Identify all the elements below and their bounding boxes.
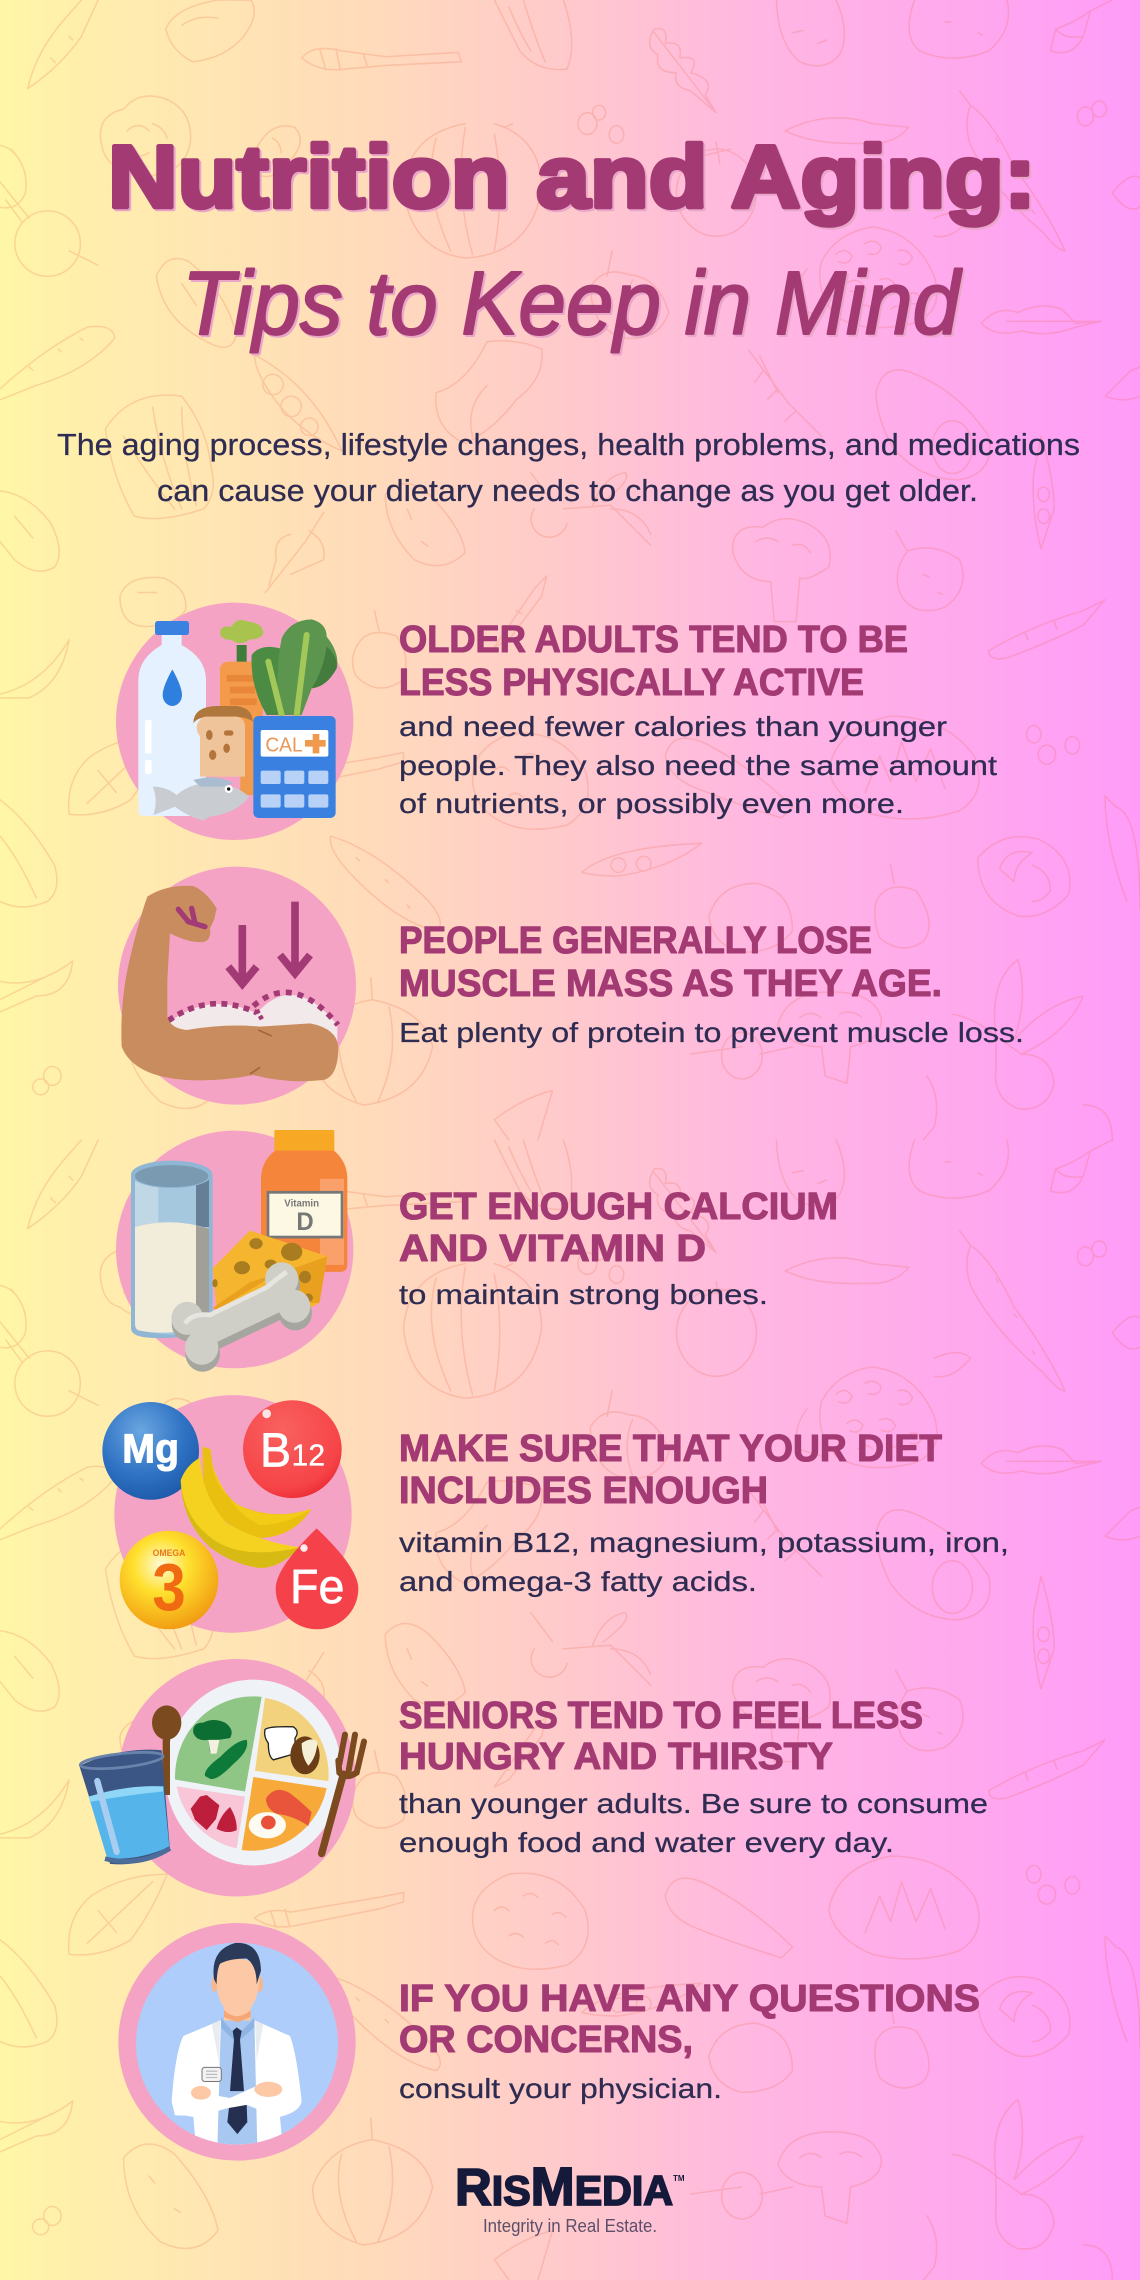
heading: OLDER ADULTS TEND TO BE [399, 619, 908, 661]
intro text: The aging process, lifestyle changes, health problems, and medications [57, 427, 1080, 462]
icon: milk, vitamin D, cheese and bone: Vitamin [284, 1198, 319, 1209]
panel: tip 4 nutrients [102, 1395, 1009, 1633]
body text: and omega-3 fatty acids. [399, 1566, 757, 1597]
icon: minerals, vitamins and bananas: Mg [122, 1427, 179, 1472]
heading [399, 619, 908, 704]
icon: physician in white coat [118, 1923, 356, 2161]
icon: minerals, vitamins and bananas: 3 [152, 1550, 186, 1626]
icon: milk, vitamin D, cheese and bone: D [296, 1209, 314, 1236]
heading [399, 1186, 838, 1270]
heading [399, 920, 942, 1005]
heading: SENIORS TEND TO FEEL LESS [399, 1695, 923, 1737]
icon: groceries and calorie calculator [116, 603, 353, 840]
intro text: can cause your dietary needs to change as you get older. [157, 473, 978, 508]
title: Nutrition and Aging: [108, 127, 1036, 226]
body text: of nutrients, or possibly even more. [399, 788, 904, 819]
panel: tip 2 muscle mass [118, 867, 1024, 1105]
icon: minerals, vitamins and bananas: B [260, 1424, 291, 1478]
body text: vitamin B12, magnesium, potassium, iron, [399, 1527, 1009, 1558]
heading: HUNGRY AND THIRSTY [399, 1736, 833, 1778]
body text: consult your physician. [399, 2073, 722, 2104]
heading [399, 1428, 942, 1512]
body text: and need fewer calories than younger [399, 711, 947, 742]
body text: enough food and water every day. [399, 1827, 894, 1858]
intro text [57, 427, 1080, 508]
panel: tip 3 calcium and vitamin D [116, 1130, 838, 1372]
heading: AND VITAMIN D [399, 1228, 706, 1270]
panel: tip 6 consult physician [118, 1923, 980, 2161]
heading: INCLUDES ENOUGH [399, 1470, 768, 1512]
logo: RisMedia: Integrity in Real Estate. [483, 2216, 657, 2236]
icon: minerals, vitamins and bananas: OMEGA [153, 1548, 186, 1558]
icon: groceries and calorie calculator: CAL [265, 733, 303, 756]
heading: GET ENOUGH CALCIUM [399, 1186, 838, 1228]
icon: minerals, vitamins and bananas [102, 1395, 358, 1633]
panel: tip 1 physical activity [116, 603, 997, 840]
body text: Eat plenty of protein to prevent muscle loss. [399, 1017, 1024, 1048]
heading: MAKE SURE THAT YOUR DIET [399, 1428, 942, 1470]
body text: to maintain strong bones. [399, 1279, 768, 1310]
icon: flexed arm with shrinking muscle [118, 867, 356, 1105]
heading: IF YOU HAVE ANY QUESTIONS [399, 1978, 980, 2020]
icon: food plate with water glass [79, 1659, 364, 1897]
heading: MUSCLE MASS AS THEY AGE. [399, 963, 942, 1005]
logo: RisMedia: TM [673, 2174, 685, 2183]
icon: milk, vitamin D, cheese and bone [116, 1130, 353, 1372]
body text [399, 1788, 988, 1858]
panel: tip 5 hunger and thirst [79, 1659, 988, 1897]
heading: PEOPLE GENERALLY LOSE [399, 920, 872, 962]
body text [399, 711, 997, 819]
icon: minerals, vitamins and bananas: 12 [292, 1438, 325, 1472]
body text: people. They also need the same amount [399, 750, 997, 781]
title [108, 127, 1036, 354]
heading [399, 1695, 923, 1778]
logo: RisMedia: RISMEDIA [455, 2157, 673, 2217]
heading: LESS PHYSICALLY ACTIVE [399, 662, 864, 704]
body text: than younger adults. Be sure to consume [399, 1788, 988, 1819]
title: Tips to Keep in Mind [182, 254, 963, 354]
body text [399, 1527, 1009, 1597]
icon: minerals, vitamins and bananas: Fe [290, 1560, 344, 1614]
heading: OR CONCERNS, [399, 2019, 693, 2061]
heading [399, 1978, 980, 2061]
